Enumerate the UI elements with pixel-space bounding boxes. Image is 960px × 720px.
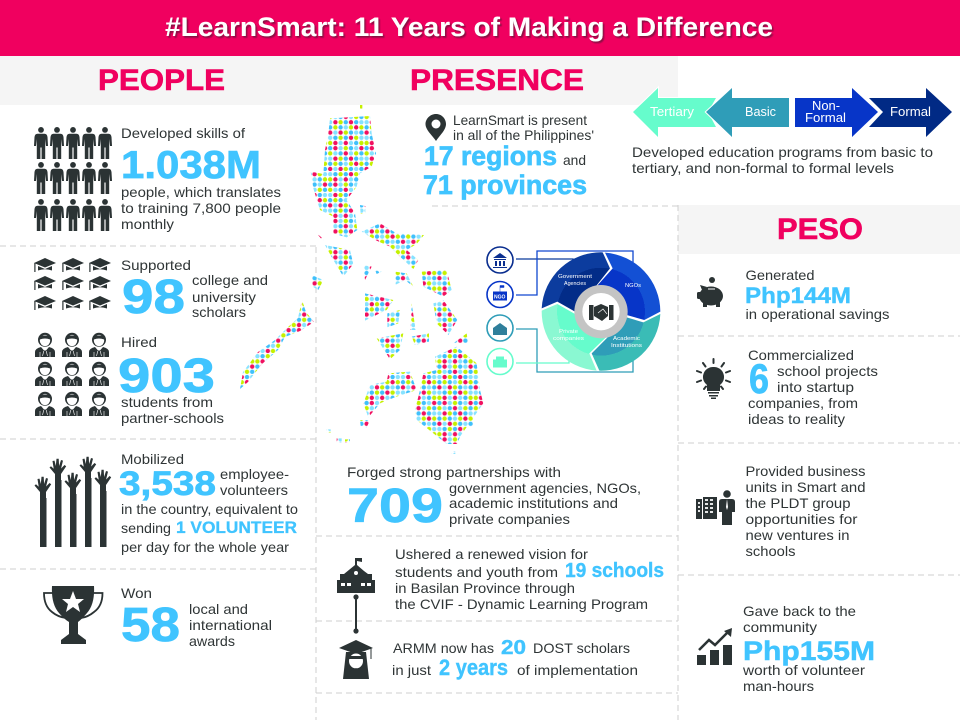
stat: 903 students hired: partner-schools xyxy=(121,410,224,426)
stat: Php144M savings: Php144M xyxy=(745,283,851,308)
stat: Php144M savings xyxy=(745,267,890,322)
icon: grid of people xyxy=(34,127,112,231)
heading: presence: PRESENCE xyxy=(410,64,584,97)
panel: peso xyxy=(696,267,890,694)
stat: regions and provinces: in all of the Philippines' xyxy=(453,127,594,143)
stat: 3,538 volunteers: in the country, equivalent to xyxy=(121,501,298,517)
arrow: tertiary xyxy=(633,88,716,137)
icon: raised hands xyxy=(34,457,111,547)
stat: 1.038M people trained: to training 7,800 people xyxy=(121,200,281,216)
stat: Php144M savings: in operational savings xyxy=(746,306,890,322)
text: business opportunities xyxy=(746,463,866,559)
stat: 98 scholars: college and xyxy=(192,272,268,288)
text: business opportunities: opportunities for xyxy=(746,511,858,527)
icon: piggy bank xyxy=(697,277,723,307)
arrow: non-formal xyxy=(795,88,878,137)
cycle wheel: Institutions xyxy=(611,343,642,349)
heading: peso: PESO xyxy=(777,213,863,246)
stat: 58 awards: international xyxy=(189,617,272,633)
stat: 709 partners: Forged strong partnerships with xyxy=(347,464,561,480)
stat: 709 partners: private companies xyxy=(449,511,570,527)
stat: Php155M volunteer hours: Gave back to the xyxy=(743,603,856,619)
title: #LearnSmart: 11 Years of Making a Difference xyxy=(165,12,773,42)
stat: 6 school projects xyxy=(748,347,878,427)
arrow labels: Formal xyxy=(805,111,846,125)
stat: 19 schools xyxy=(395,546,664,612)
stat: 19 schools: Ushered a renewed vision for xyxy=(395,546,588,562)
stat: 3,538 volunteers: employee- xyxy=(220,466,289,482)
stat: 20 DOST scholars: DOST scholars xyxy=(533,640,630,656)
cycle wheel: Government xyxy=(558,274,592,280)
education programs text: Developed education programs from basic to xyxy=(632,144,933,160)
arrow: formal xyxy=(869,88,952,137)
heading: people: PEOPLE xyxy=(98,64,225,97)
icon: rising bar chart xyxy=(697,628,732,665)
stat: 1.038M people trained: Developed skills of xyxy=(121,125,245,141)
dotted map of the Philippines xyxy=(240,105,484,454)
stat: 98 scholars xyxy=(121,257,268,324)
stat: 3,538 volunteers: sending xyxy=(121,520,171,536)
arrow: basic xyxy=(706,88,789,137)
stat: 98 scholars: scholars xyxy=(192,304,246,320)
stat: 20 DOST scholars: in just xyxy=(392,662,431,678)
stat: Php155M volunteer hours: community xyxy=(743,619,817,635)
section band: peso xyxy=(678,205,960,254)
icon: light bulb xyxy=(697,359,730,399)
stat: 19 schools: the CVIF - Dynamic Learning Program xyxy=(395,596,648,612)
stat: regions and provinces: LearnSmart is present xyxy=(453,112,587,128)
section band: people and presence xyxy=(0,56,678,105)
stat: 19 schools: 19 schools xyxy=(565,560,664,582)
icon: school with connector to scholar xyxy=(337,558,375,634)
text: business opportunities: units in Smart and xyxy=(746,479,866,495)
icon: building and businessman xyxy=(696,490,735,525)
stat: 19 schools: students and youth from xyxy=(395,564,558,580)
stat: 19 schools: in Basilan Province through xyxy=(395,580,575,596)
icon: graduation caps xyxy=(34,258,111,310)
stat: Php155M volunteer hours: Php155M xyxy=(743,636,875,666)
stat: 3,538 volunteers: volunteers xyxy=(220,482,288,498)
arrow labels: Non- xyxy=(812,99,840,113)
partner icon: government xyxy=(487,247,513,273)
icon: female graduate xyxy=(339,640,373,679)
cycle wheel xyxy=(542,252,660,371)
stat: 58 awards xyxy=(121,585,272,652)
stat: 98 scholars: university xyxy=(192,289,256,305)
stat: 709 partners: academic institutions and xyxy=(449,495,618,511)
stat: 6 school projects: 6 xyxy=(749,355,769,402)
stat: 20 DOST scholars: ARMM now has xyxy=(393,640,494,656)
stat: 20 DOST scholars: of implementation xyxy=(517,662,638,678)
partnership diagram xyxy=(487,247,660,374)
partner icon: NGO: NGO xyxy=(494,294,506,300)
stat: Php155M volunteer hours xyxy=(742,603,875,694)
text: business opportunities: schools xyxy=(746,543,796,559)
education programs text: tertiary, and non-formal to formal levels xyxy=(632,160,894,176)
stat: 3,538 volunteers: per day for the whole year xyxy=(121,539,289,555)
stat: 98 scholars: 98 xyxy=(122,271,185,324)
stat: 903 students hired: 903 xyxy=(118,350,215,403)
stat: 3,538 volunteers xyxy=(119,451,298,555)
arrow labels xyxy=(650,99,931,125)
stat: Php155M volunteer hours: man-hours xyxy=(743,678,814,694)
arrow labels: Tertiary xyxy=(650,105,695,119)
stat: 1.038M people trained xyxy=(121,125,281,232)
icon: trophy xyxy=(44,586,102,644)
stat: 58 awards: local and xyxy=(189,601,248,617)
stat: regions and provinces: 71 provinces xyxy=(423,170,587,200)
stat: 903 students hired xyxy=(118,334,224,426)
stat: 20 DOST scholars xyxy=(392,637,638,680)
text: business opportunities: Provided business xyxy=(746,463,866,479)
stat: 98 scholars: Supported xyxy=(121,257,191,273)
stat: 3,538 volunteers: 3,538 xyxy=(119,465,216,503)
stat: 58 awards: awards xyxy=(189,633,235,649)
stat: 1.038M people trained: monthly xyxy=(121,216,174,232)
stat: Php144M savings: Generated xyxy=(746,267,814,283)
stat: 6 school projects: Commercialized xyxy=(748,347,854,363)
stat: 1.038M people trained: 1.038M xyxy=(121,144,261,187)
cycle wheel: Agencies xyxy=(564,281,586,287)
arrow labels: Formal xyxy=(890,105,931,119)
text: business opportunities: new ventures in xyxy=(746,527,850,543)
stat: 58 awards: Won xyxy=(121,585,152,601)
stat: 3,538 volunteers: 1 VOLUNTEER xyxy=(176,518,297,537)
stat: 58 awards: 58 xyxy=(121,599,180,652)
cycle wheel: Academic xyxy=(613,336,640,342)
connector lines xyxy=(516,251,633,372)
cycle wheel: Private xyxy=(559,329,578,335)
panel: presence xyxy=(230,88,952,680)
stat: 20 DOST scholars: 20 xyxy=(501,637,526,659)
stat: 6 school projects: into startup xyxy=(777,379,854,395)
icon: location pin xyxy=(426,114,446,141)
stat: 903 students hired: Hired xyxy=(121,334,157,350)
text: business opportunities: the PLDT group xyxy=(746,495,851,511)
cycle wheel: NGOs xyxy=(625,283,641,289)
stat: 709 partners: government agencies, NGOs, xyxy=(449,480,641,496)
partner icon: academic xyxy=(487,315,513,341)
icon: handshake xyxy=(589,304,614,321)
partner icon: private companies xyxy=(487,348,513,374)
partner icon: NGO xyxy=(487,282,513,308)
stat: regions and provinces: and xyxy=(563,152,586,168)
stat: 1.038M people trained: people, which translates xyxy=(121,184,281,200)
panel: people xyxy=(34,125,298,652)
cycle wheel: companies xyxy=(553,336,584,342)
stat: 3,538 volunteers: Mobilized xyxy=(121,451,184,467)
page header banner xyxy=(0,0,960,56)
stat: Php155M volunteer hours: worth of volunteer xyxy=(742,662,865,678)
stat: 6 school projects: ideas to reality xyxy=(748,411,845,427)
stat: regions and provinces xyxy=(423,112,594,200)
education level arrows xyxy=(633,88,952,137)
stat: 6 school projects: companies, from xyxy=(748,395,858,411)
stat: 6 school projects: school projects xyxy=(777,363,878,379)
stat: 20 DOST scholars: 2 years xyxy=(439,655,508,680)
arrow labels: Basic xyxy=(745,105,776,119)
stat: 709 partners: 709 xyxy=(347,480,443,533)
icon: hired students xyxy=(35,333,109,416)
education programs text xyxy=(632,144,933,176)
stat: regions and provinces: 17 regions xyxy=(424,141,557,171)
stat: 903 students hired: students from xyxy=(121,394,213,410)
stat: 709 partners xyxy=(347,464,641,533)
